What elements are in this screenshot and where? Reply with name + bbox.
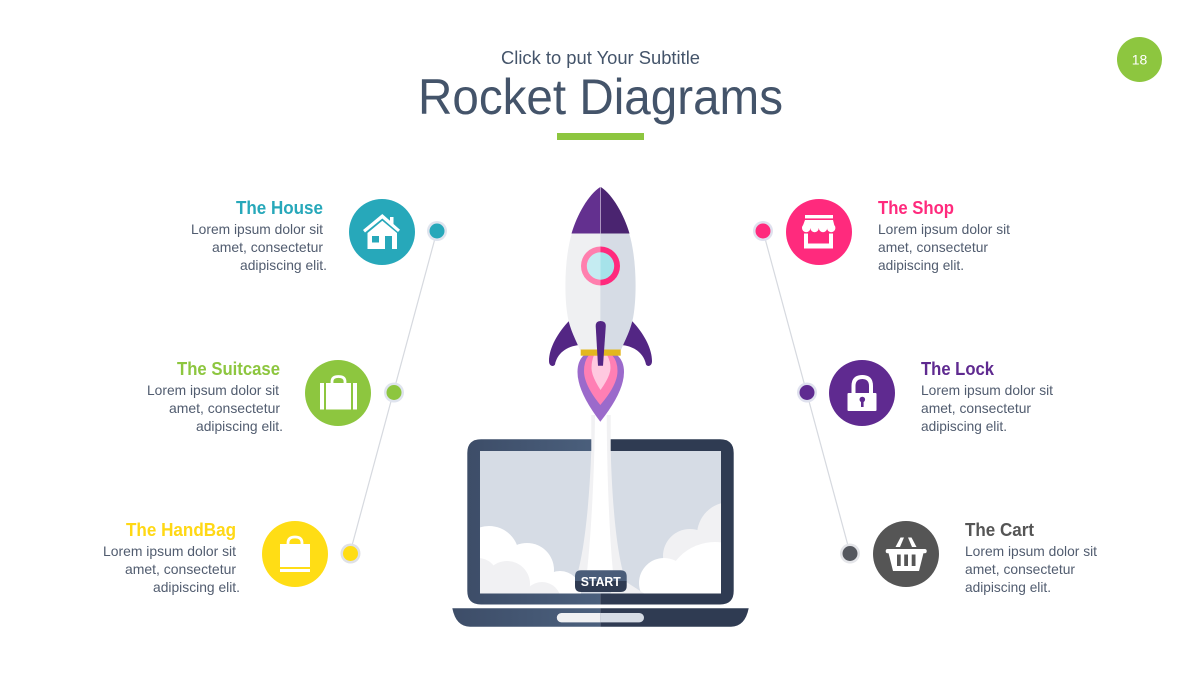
text: the cart: [965, 543, 1097, 595]
heading: the handbag: The HandBag: [126, 519, 236, 540]
heading: the shop: The Shop: [878, 197, 954, 218]
text: the cart: adipiscing elit.: [965, 579, 1051, 595]
text: the handbag: Lorem ipsum dolor sit: [103, 543, 236, 559]
text: the house: [191, 221, 327, 273]
text: the shop: Lorem ipsum dolor sit: [878, 221, 1010, 237]
text: the handbag: amet, consectetur: [125, 561, 236, 577]
connector line right: [763, 231, 850, 553]
heading: the house: The House: [236, 197, 323, 218]
text: the cart: Lorem ipsum dolor sit: [965, 543, 1097, 559]
start button: [575, 570, 627, 592]
laptop base: [452, 608, 749, 627]
heading: the cart: The Cart: [965, 519, 1034, 540]
text: the lock: amet, consectetur: [921, 400, 1031, 416]
text: the house: amet, consectetur: [212, 239, 323, 255]
page number badge: 18: [1132, 52, 1147, 68]
rocket nose cone: [572, 187, 630, 234]
subtitle: Click to put Your Subtitle: [501, 48, 700, 68]
laptop: [452, 439, 749, 627]
node dot: cart: [840, 544, 860, 564]
rocket centre fin: [596, 321, 606, 366]
panel: the cart: [840, 519, 1097, 595]
text: the shop: amet, consectetur: [878, 239, 988, 255]
rocket window: [581, 246, 620, 286]
panel: the shop: [753, 197, 1010, 273]
start button: START: [581, 574, 621, 589]
text: the cart: amet, consectetur: [965, 561, 1075, 577]
node dot: suitcase: [384, 382, 404, 402]
panel: the house: [191, 197, 447, 273]
panel: the lock: [797, 358, 1053, 434]
icon: house: [349, 199, 415, 265]
text: the suitcase: [147, 382, 283, 434]
text: the suitcase: adipiscing elit.: [196, 418, 283, 434]
text: the shop: adipiscing elit.: [878, 257, 964, 273]
icon: suitcase: [305, 360, 371, 426]
rocket side fins: [549, 320, 652, 366]
rocket smoke trail: [578, 415, 623, 572]
text: the house: adipiscing elit.: [240, 257, 327, 273]
node dot: handbag: [340, 544, 360, 564]
rocket body: [565, 233, 636, 350]
heading: the lock: The Lock: [921, 358, 995, 379]
heading: the suitcase: The Suitcase: [177, 358, 280, 379]
rocket flame: [578, 355, 624, 422]
text: the shop: [878, 221, 1010, 273]
panel: the handbag: [103, 519, 360, 595]
rocket yellow band: [581, 350, 621, 356]
text: the house: Lorem ipsum dolor sit: [191, 221, 323, 237]
node dot: shop: [753, 221, 773, 241]
text: the lock: Lorem ipsum dolor sit: [921, 382, 1053, 398]
node dot: lock: [797, 382, 817, 402]
clouds: [480, 503, 721, 594]
connector line left: [350, 231, 437, 553]
icon: handbag: [262, 521, 328, 587]
page number badge: [1117, 37, 1162, 82]
text: the suitcase: Lorem ipsum dolor sit: [147, 382, 279, 398]
text: the suitcase: amet, consectetur: [169, 400, 280, 416]
text: the lock: adipiscing elit.: [921, 418, 1007, 434]
text: the lock: [921, 382, 1053, 434]
icon: cart: [873, 521, 939, 587]
node dot: house: [427, 221, 447, 241]
panel: the suitcase: [147, 358, 404, 434]
title underline: [557, 133, 644, 140]
title: Rocket Diagrams: [418, 69, 783, 125]
icon: shop: [786, 199, 852, 265]
text: the handbag: adipiscing elit.: [153, 579, 240, 595]
rocket: [549, 187, 652, 422]
laptop screen: [480, 451, 721, 594]
icon: lock: [829, 360, 895, 426]
text: the handbag: [103, 543, 240, 595]
laptop lid: [467, 439, 734, 604]
